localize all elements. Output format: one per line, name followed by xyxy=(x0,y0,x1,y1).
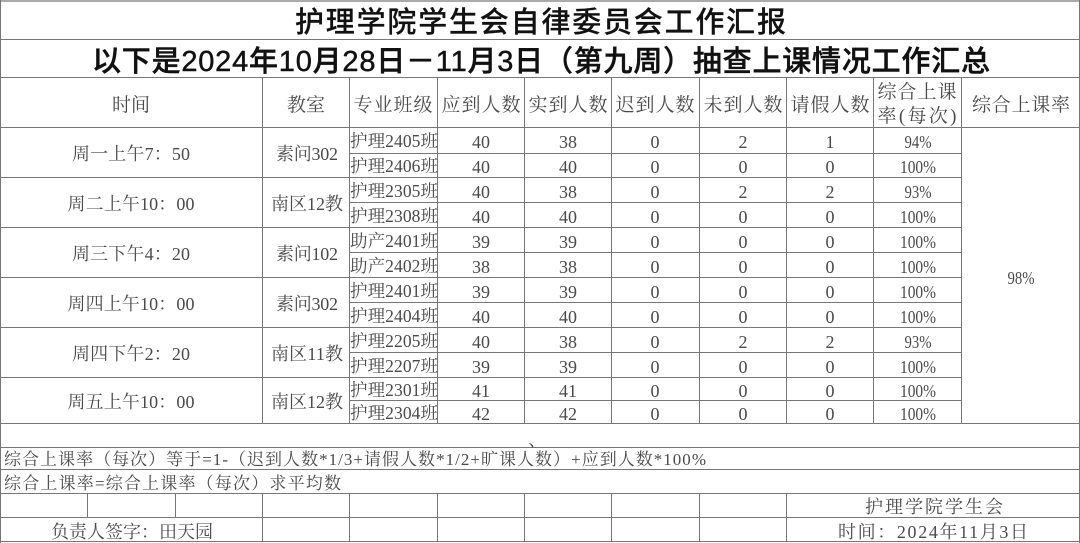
class names: 护理2301班 xyxy=(350,380,438,400)
table header xyxy=(112,81,1070,127)
late column: 0 xyxy=(650,182,660,202)
formula note 1: 综合上课率（每次）等于=1-（迟到人数*1/3+请假人数*1/2+旷课人数）+应到人数*100% xyxy=(4,450,706,469)
late column: 0 xyxy=(650,404,660,424)
expected attendance column: 40 xyxy=(472,132,490,152)
late column: 0 xyxy=(650,332,660,352)
schedule times: 周五上午10：00 xyxy=(68,392,194,412)
table header: 综合上课 xyxy=(878,81,956,103)
table header: 迟到人数 xyxy=(616,94,694,116)
absent column xyxy=(738,132,748,424)
per-session attendance rate column: 100% xyxy=(900,404,936,424)
organisation: 护理学院学生会 xyxy=(865,497,1003,517)
class names: 护理2305班 xyxy=(350,181,438,201)
signature: 负责人签字：田天园 xyxy=(51,522,213,542)
classrooms: 素问102 xyxy=(276,244,338,264)
per-session attendance rate column: 93% xyxy=(904,332,932,352)
class names: 护理2205班 xyxy=(350,331,438,351)
table header: 专业班级 xyxy=(354,94,432,116)
table header: 教室 xyxy=(287,94,325,116)
absent column: 0 xyxy=(738,404,748,424)
expected attendance column xyxy=(472,132,490,424)
absent column: 0 xyxy=(738,257,748,277)
absent column: 2 xyxy=(738,132,748,152)
class names: 护理2207班 xyxy=(350,356,438,376)
expected attendance column: 40 xyxy=(472,182,490,202)
leave column: 0 xyxy=(826,282,834,302)
classrooms xyxy=(271,144,343,412)
class names: 助产2402班 xyxy=(350,256,438,276)
schedule times: 周三下午4：20 xyxy=(72,244,190,264)
classrooms: 素问302 xyxy=(276,294,338,314)
actual attendance column: 40 xyxy=(559,157,577,177)
actual attendance column: 42 xyxy=(559,404,577,424)
schedule times xyxy=(68,144,194,412)
actual attendance column: 39 xyxy=(559,232,577,252)
class names xyxy=(350,131,438,423)
table header: 应到人数 xyxy=(442,94,520,116)
table header: 未到人数 xyxy=(704,94,782,116)
actual attendance column: 38 xyxy=(559,257,577,277)
table header: 请假人数 xyxy=(790,94,870,116)
formula note 2: 综合上课率=综合上课率（每次）求平均数 xyxy=(4,474,341,493)
leave column: 0 xyxy=(826,232,834,252)
per-session attendance rate column: 94% xyxy=(904,132,932,152)
late column: 0 xyxy=(650,357,660,377)
expected attendance column: 40 xyxy=(472,307,490,327)
date: 时间：2024年11月3日 xyxy=(838,521,1028,542)
class names: 护理2404班 xyxy=(350,306,438,326)
schedule times: 周二上午10：00 xyxy=(68,194,194,214)
leave column: 0 xyxy=(826,357,834,377)
per-session attendance rate column: 100% xyxy=(900,207,936,227)
late column: 0 xyxy=(650,282,660,302)
absent column: 0 xyxy=(738,207,748,227)
expected attendance column: 39 xyxy=(472,282,490,302)
expected attendance column: 40 xyxy=(472,332,490,352)
expected attendance column: 41 xyxy=(472,381,490,401)
expected attendance column: 40 xyxy=(472,157,490,177)
classrooms: 南区12教 xyxy=(271,193,343,214)
absent column: 0 xyxy=(738,157,748,177)
leave column: 2 xyxy=(826,332,834,352)
leave column: 0 xyxy=(826,207,834,227)
late column xyxy=(650,132,660,424)
per-session attendance rate column: 100% xyxy=(900,282,936,302)
per-session attendance rate column: 100% xyxy=(900,257,936,277)
late column: 0 xyxy=(650,232,660,252)
late column: 0 xyxy=(650,307,660,327)
per-session attendance rate column: 100% xyxy=(900,232,936,252)
per-session attendance rate column: 100% xyxy=(900,307,936,327)
schedule times: 周四下午2：20 xyxy=(72,344,190,364)
expected attendance column: 40 xyxy=(472,207,490,227)
actual attendance column: 39 xyxy=(559,357,577,377)
late column: 0 xyxy=(650,132,660,152)
classrooms: 南区11教 xyxy=(271,343,343,364)
subtitle: 以下是2024年10月28日－11月3日（第九周）抽查上课情况工作汇总 xyxy=(92,45,990,78)
actual attendance column: 41 xyxy=(559,381,577,401)
absent column: 0 xyxy=(738,381,748,401)
expected attendance column: 39 xyxy=(472,357,490,377)
schedule times: 周四上午10：00 xyxy=(68,294,194,314)
table header: 实到人数 xyxy=(528,94,608,116)
late column: 0 xyxy=(650,207,660,227)
absent column: 2 xyxy=(738,332,748,352)
class names: 助产2401班 xyxy=(350,231,438,251)
title: 护理学院学生会自律委员会工作汇报 xyxy=(295,6,786,39)
absent column: 2 xyxy=(738,182,748,202)
per-session attendance rate column xyxy=(900,132,936,424)
expected attendance column: 38 xyxy=(472,257,490,277)
leave column: 2 xyxy=(826,182,834,202)
per-session attendance rate column: 100% xyxy=(900,357,936,377)
actual attendance column: 40 xyxy=(559,307,577,327)
leave column: 1 xyxy=(826,132,834,152)
absent column: 0 xyxy=(738,357,748,377)
classrooms: 素问302 xyxy=(276,144,338,164)
leave column: 0 xyxy=(826,381,834,401)
actual attendance column: 38 xyxy=(559,332,577,352)
class names: 护理2401班 xyxy=(350,281,438,301)
leave column: 0 xyxy=(826,307,834,327)
late column: 0 xyxy=(650,157,660,177)
actual attendance column: 39 xyxy=(559,282,577,302)
table header: 率(每次) xyxy=(878,105,956,127)
class names: 护理2304班 xyxy=(350,403,438,423)
actual attendance column: 38 xyxy=(559,132,577,152)
late column: 0 xyxy=(650,381,660,401)
expected attendance column: 42 xyxy=(472,404,490,424)
leave column: 0 xyxy=(826,157,834,177)
expected attendance column: 39 xyxy=(472,232,490,252)
absent column: 0 xyxy=(738,282,748,302)
per-session attendance rate column: 93% xyxy=(904,182,932,202)
leave column xyxy=(826,132,834,424)
absent column: 0 xyxy=(738,307,748,327)
late column: 0 xyxy=(650,257,660,277)
stray mark: 、 xyxy=(528,430,546,450)
classrooms: 南区12教 xyxy=(271,391,343,412)
class names: 护理2308班 xyxy=(350,206,438,226)
leave column: 0 xyxy=(826,404,834,424)
actual attendance column xyxy=(559,132,577,424)
class names: 护理2405班 xyxy=(350,131,438,151)
class names: 护理2406班 xyxy=(350,156,438,176)
per-session attendance rate column: 100% xyxy=(900,157,936,177)
schedule times: 周一上午7：50 xyxy=(72,144,190,164)
per-session attendance rate column: 100% xyxy=(900,381,936,401)
actual attendance column: 38 xyxy=(559,182,577,202)
absent column: 0 xyxy=(738,232,748,252)
overall attendance rate: 98% xyxy=(1008,268,1034,288)
leave column: 0 xyxy=(826,257,834,277)
table header: 时间 xyxy=(112,94,150,116)
actual attendance column: 40 xyxy=(559,207,577,227)
table header: 综合上课率 xyxy=(972,94,1070,116)
